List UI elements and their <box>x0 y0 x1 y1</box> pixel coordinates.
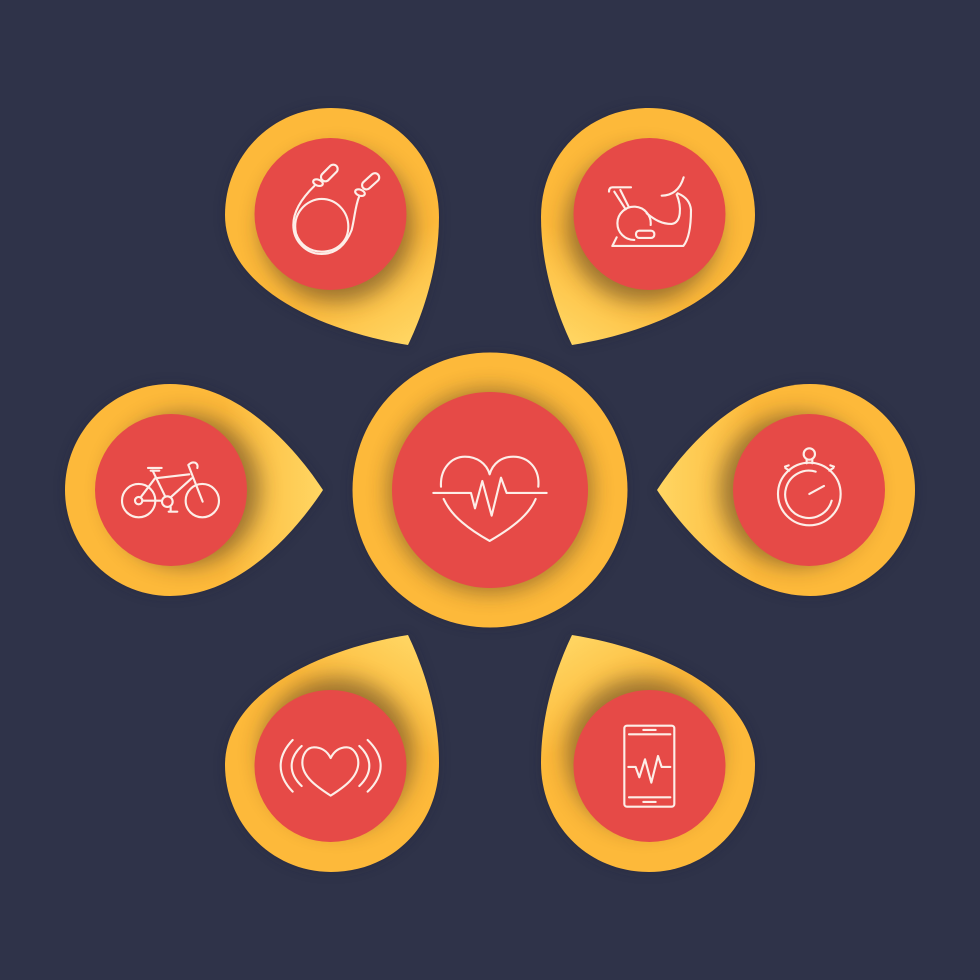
icon: jump rope <box>293 163 381 254</box>
icon: vibrating heart <box>281 740 381 796</box>
red circle: central heartbeat <box>392 392 588 588</box>
panel: vibrating heart <box>225 635 439 872</box>
teardrop: vibrating heart <box>225 635 439 872</box>
panel: stopwatch <box>657 384 915 596</box>
icon: bicycle <box>122 462 219 517</box>
panel: bicycle <box>65 384 323 596</box>
red circle: jump rope <box>254 138 406 290</box>
red circle: bicycle <box>95 414 247 566</box>
icon: phone heart rate <box>624 726 674 807</box>
teardrop: stopwatch <box>657 384 915 596</box>
teardrop: phone heart rate <box>541 635 755 872</box>
icon: exercise bike <box>609 177 691 246</box>
red circle: stopwatch <box>733 414 885 566</box>
icon: stopwatch <box>778 448 841 525</box>
panel: central heartbeat <box>352 352 628 628</box>
panel: exercise bike <box>541 108 755 345</box>
outer ring: central heartbeat <box>352 352 628 628</box>
icon: heart with pulse <box>433 457 547 541</box>
red circle: exercise bike <box>574 138 726 290</box>
panel: jump rope <box>225 108 439 345</box>
teardrop: bicycle <box>65 384 323 596</box>
red circle: vibrating heart <box>254 690 406 842</box>
red circle: phone heart rate <box>574 690 726 842</box>
panel: phone heart rate <box>541 635 755 872</box>
teardrop: exercise bike <box>541 108 755 345</box>
teardrop: jump rope <box>225 108 439 345</box>
